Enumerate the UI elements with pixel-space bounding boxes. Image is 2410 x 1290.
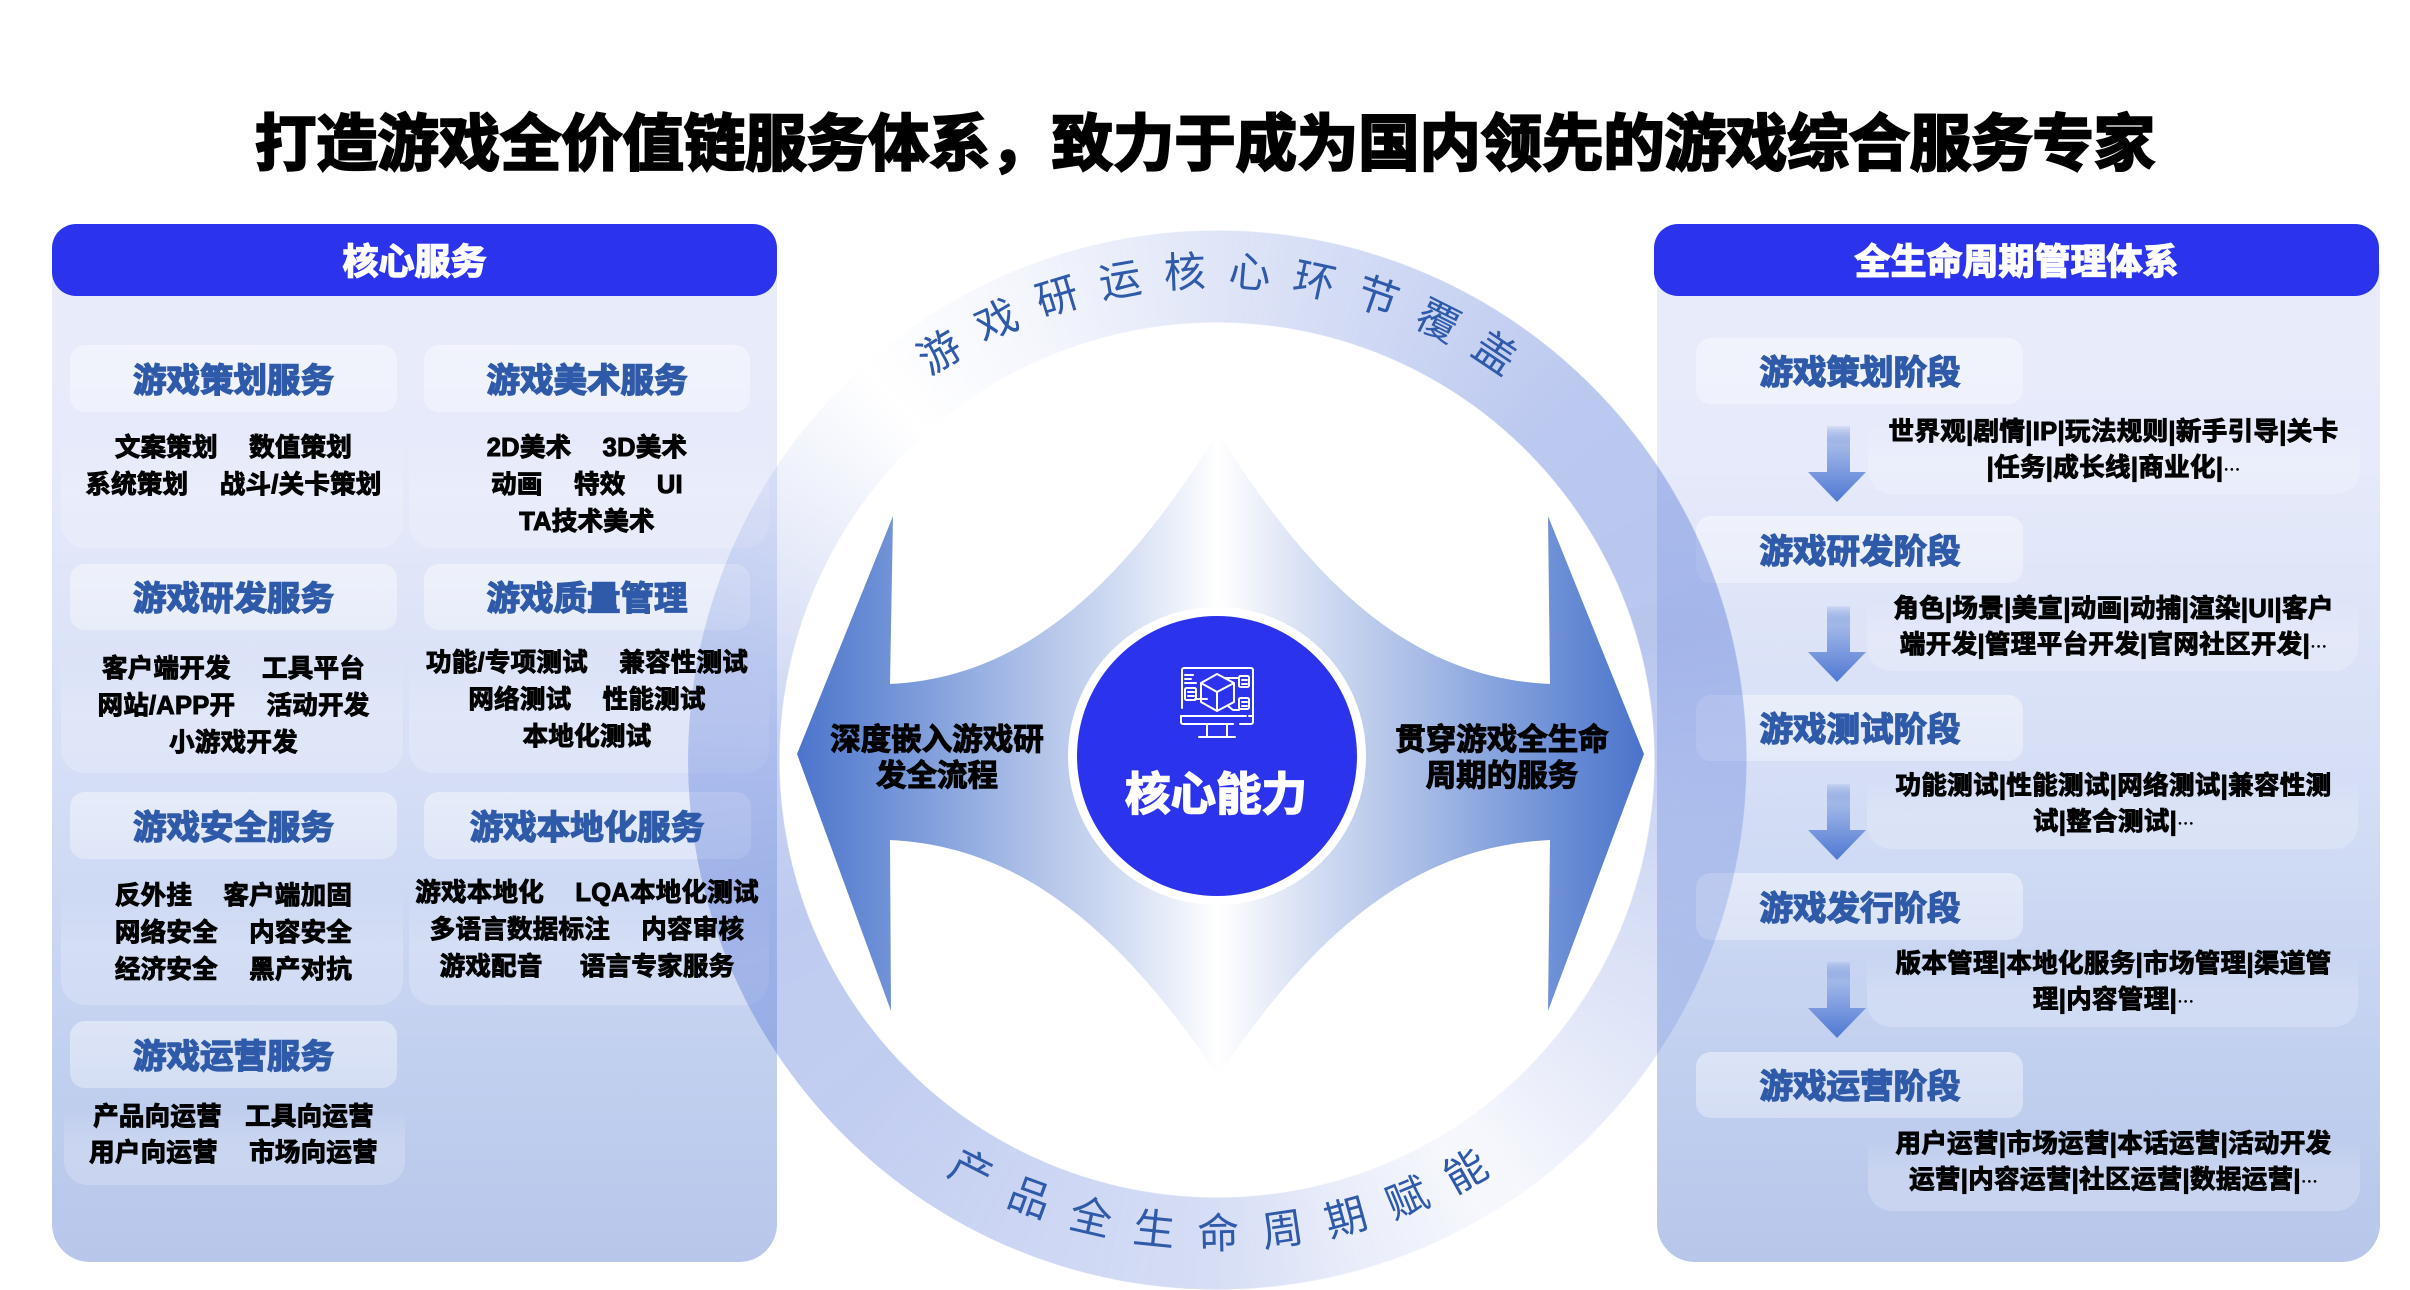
stage: planning <box>1696 338 2338 482</box>
stage: testing <box>1696 695 2358 849</box>
stage: planning: |任务|成长线|商业化|… <box>1987 454 2240 482</box>
service card: operations: 游戏运营服务 <box>133 1039 334 1076</box>
service card: development: 客户端开发 工具平台 <box>102 654 365 682</box>
stage: development: 游戏研发阶段 <box>1760 534 1960 571</box>
stage: testing: 游戏测试阶段 <box>1760 712 1960 749</box>
service card: security: 游戏安全服务 <box>133 810 334 847</box>
service card: art: 动画 特效 UI <box>491 470 683 498</box>
panel heading: core services <box>52 224 777 296</box>
service card: localization: 游戏配音 语言专家服务 <box>440 952 734 980</box>
title: 打造游戏全价值链服务体系，致力于成为国内领先的游戏综合服务专家 <box>255 110 2155 178</box>
arrow: testing to publishing <box>1808 784 1866 860</box>
service card: art <box>424 345 750 536</box>
icon: monitor with cube <box>1181 668 1253 737</box>
service card: security: 网络安全 内容安全 <box>115 918 352 946</box>
center label: 核心能力 <box>1125 769 1307 820</box>
service card: quality: 本地化测试 <box>523 722 651 750</box>
left arrow label: 发全流程 <box>876 759 998 793</box>
stage: operations: 用户运营|市场运营|本话运营|活动开发 <box>1895 1130 2332 1158</box>
service card: planning: 文案策划 数值策划 <box>115 434 352 462</box>
stage: planning: 世界观|剧情|IP|玩法规则|新手引导|关卡 <box>1889 418 2338 446</box>
stage: publishing: 游戏发行阶段 <box>1760 891 1960 928</box>
stage: publishing: 版本管理|本地化服务|市场管理|渠道管 <box>1895 950 2332 978</box>
stage: publishing: 理|内容管理|… <box>2033 986 2194 1014</box>
stage: operations <box>1696 1052 2360 1211</box>
service card: operations: 用户向运营 市场向运营 <box>89 1138 378 1166</box>
panel heading: lifecycle management: 全生命周期管理体系 <box>1854 241 2178 282</box>
service card: localization: 游戏本地化服务 <box>470 810 704 847</box>
service card: development <box>70 564 397 756</box>
service card: planning <box>70 345 397 498</box>
panel: core services <box>52 224 777 1262</box>
stage: operations: 运营|内容运营|社区运营|数据运营|… <box>1909 1166 2318 1194</box>
service card: planning: 游戏策划服务 <box>133 363 334 400</box>
service card: quality: 功能/专项测试 兼容性测试 <box>426 648 748 676</box>
stage: development <box>1696 516 2334 660</box>
service card: art: 2D美术 3D美术 <box>487 434 687 462</box>
service card: quality: 网络测试 性能测试 <box>468 686 706 714</box>
service card: security: 经济安全 黑产对抗 <box>115 956 352 984</box>
service card: art: TA技术美术 <box>519 508 655 536</box>
service card: localization <box>409 792 759 1005</box>
arrow: planning to development <box>1808 426 1866 502</box>
ring text: top arc: 游戏研运核心环节覆盖 <box>915 251 1517 378</box>
service card: operations <box>64 1021 405 1185</box>
stage: testing: 试|整合测试|… <box>2033 808 2194 836</box>
service card: art: 游戏美术服务 <box>486 363 688 400</box>
service card: localization: 多语言数据标注 内容审核 <box>430 916 744 944</box>
service card: localization: 游戏本地化 LQA本地化测试 <box>415 878 759 906</box>
stage: development: 角色|场景|美宣|动画|动捕|渲染|UI|客户 <box>1893 594 2334 622</box>
panel heading: core services: 核心服务 <box>342 241 486 282</box>
service card: quality: 游戏质量管理 <box>486 581 688 618</box>
service card: development: 小游戏开发 <box>169 728 298 756</box>
right arrow label: 周期的服务 <box>1426 759 1578 793</box>
stage: planning: 游戏策划阶段 <box>1760 355 1960 392</box>
outer ring <box>688 230 1748 1290</box>
center circle <box>1068 607 1366 905</box>
service card: operations: 产品向运营 工具向运营 <box>93 1102 374 1130</box>
right arrow label: 贯穿游戏全生命 <box>1395 722 1609 757</box>
panel heading: lifecycle management <box>1654 224 2379 296</box>
stage: publishing <box>1696 873 2358 1027</box>
stage: testing: 功能测试|性能测试|网络测试|兼容性测 <box>1895 772 2332 800</box>
arrow: development to testing <box>1808 606 1866 682</box>
stage: operations: 游戏运营阶段 <box>1760 1069 1960 1106</box>
service card: quality <box>424 564 750 750</box>
four-point arrow shape <box>797 432 1644 1076</box>
service card: security <box>61 792 403 1005</box>
service card: security: 反外挂 客户端加固 <box>115 882 352 910</box>
panel: lifecycle management <box>1654 224 2380 1262</box>
service card: development: 网站/APP开 活动开发 <box>97 692 370 720</box>
arrow: publishing to operations <box>1808 962 1866 1038</box>
left arrow label: 深度嵌入游戏研 <box>830 723 1044 757</box>
service card: planning: 系统策划 战斗/关卡策划 <box>85 470 382 498</box>
service card: development: 游戏研发服务 <box>133 581 334 618</box>
stage: development: 端开发|管理平台开发|官网社区开发|… <box>1900 630 2327 658</box>
ring text: bottom arc: 产品全生命周期赋能 <box>946 1148 1490 1252</box>
